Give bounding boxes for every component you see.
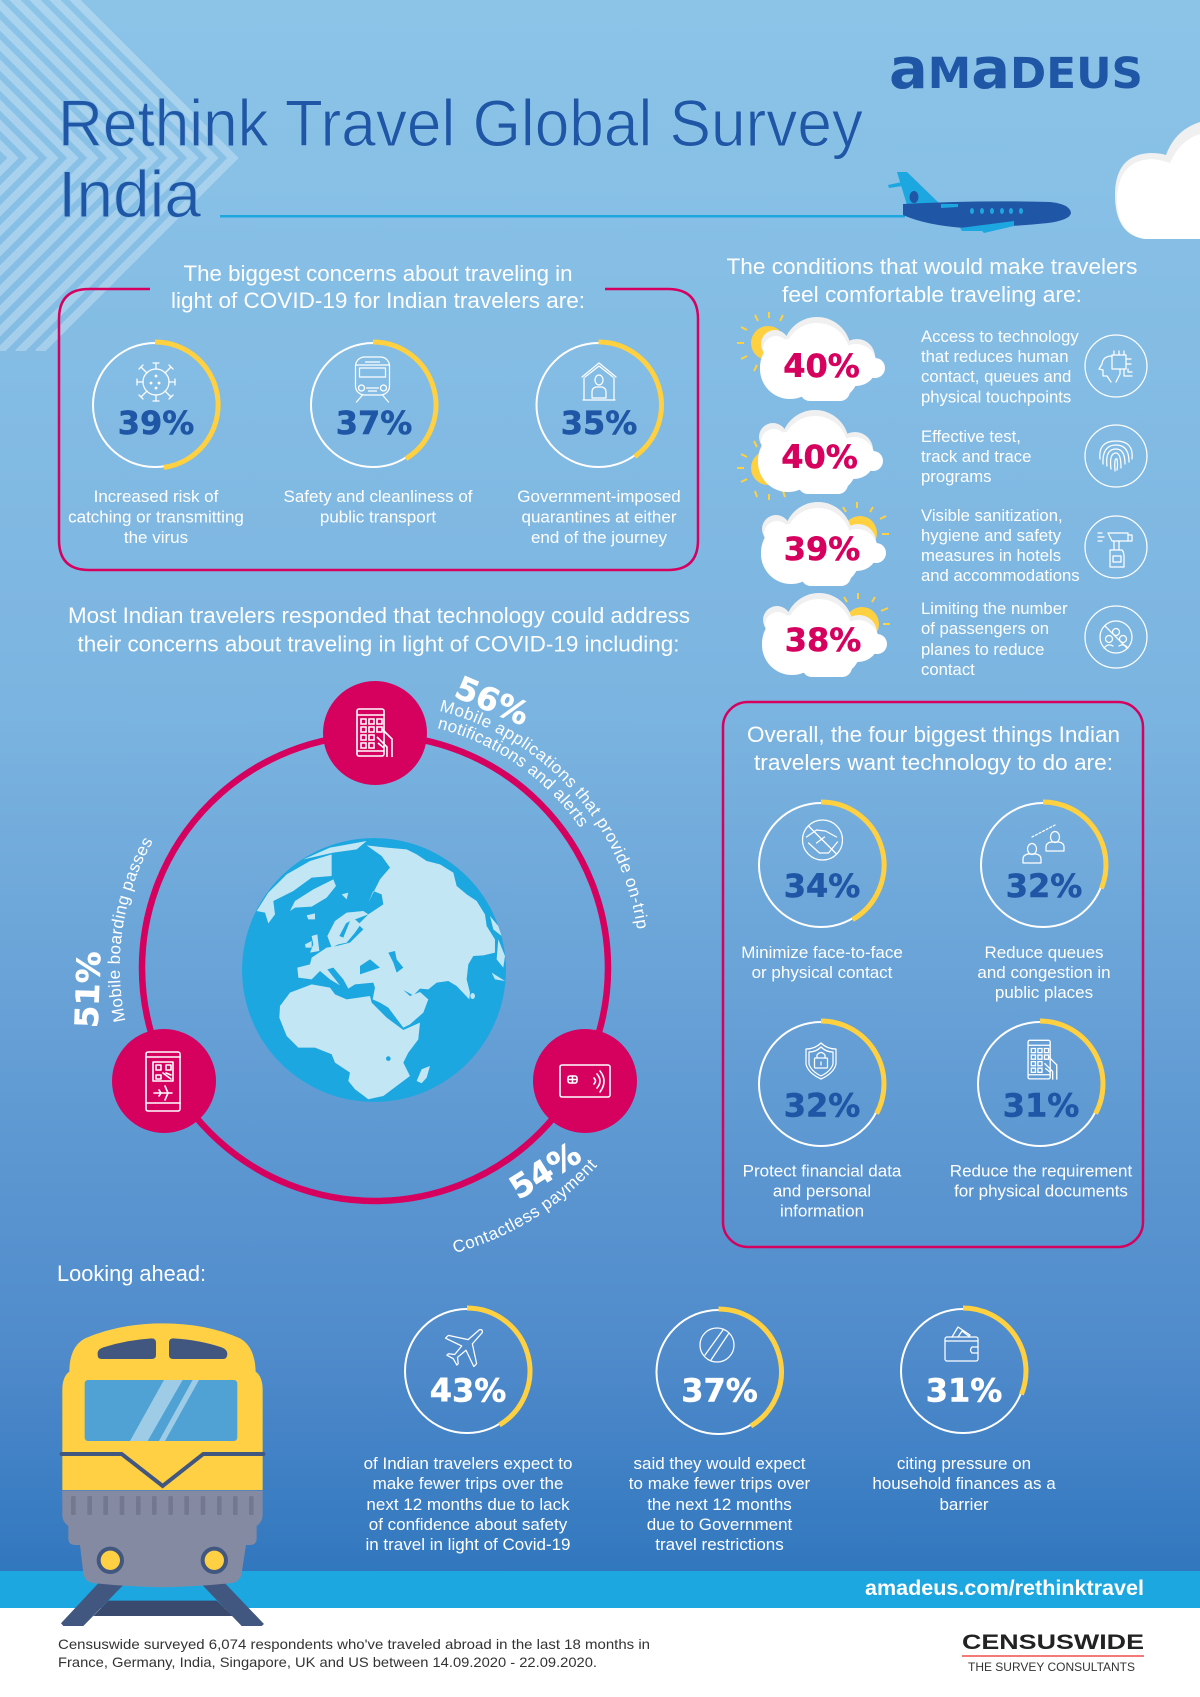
- heading: conditions: [726, 254, 1138, 307]
- stat: 37% restrictions: travel restrictions: [655, 1535, 784, 1554]
- stat: 37% train: public transport: [320, 508, 436, 526]
- condition: sanitization 39%: Visible sanitization,: [921, 506, 1063, 525]
- condition: limiting passengers 38%: contact: [921, 660, 975, 679]
- condition: technology 40%: Access to technology: [921, 327, 1079, 346]
- heading: [171, 261, 585, 313]
- stat: 37% restrictions: [629, 1309, 811, 1554]
- icon: airplane: [888, 172, 1071, 233]
- stat: 32% queues: Reduce queues: [984, 943, 1104, 962]
- condition: sanitization 39%: [761, 502, 1147, 586]
- heading: technology could address concerns: [68, 603, 690, 656]
- icon: card: [560, 1065, 610, 1097]
- title: India: [58, 157, 201, 231]
- icon: phone with hand: [357, 709, 392, 757]
- label: 51% boarding passes: 51%: [68, 951, 108, 1029]
- stat: 43% fewer trips: [364, 1308, 572, 1554]
- heading: Overall, the four biggest things Indian: [747, 722, 1120, 747]
- stat: 31% finances: citing pressure on: [897, 1454, 1031, 1473]
- heading: The biggest concerns about traveling in: [184, 261, 572, 286]
- icon: house with person: [582, 363, 616, 400]
- stat: 34%: Minimize face-to-face: [741, 943, 903, 962]
- icon: fingerprint: [1100, 441, 1132, 471]
- stat: 39% virus: catching or transmitting: [68, 508, 244, 526]
- heading: light of COVID-19 for Indian travelers are:: [171, 288, 585, 313]
- condition: sanitization 39%: hygiene and safety: [921, 526, 1062, 545]
- icon: no handshake: [802, 820, 842, 860]
- stat: 37% restrictions: to make fewer trips over: [629, 1474, 811, 1493]
- logo: censuswide: CENSUSWIDE: [962, 1631, 1144, 1654]
- footnote: France, Germany, India, Singapore, UK and US between 14.09.2020 - 22.09.2020.: [58, 1654, 597, 1670]
- stat: 43% fewer trips: of confidence about safety: [369, 1515, 568, 1534]
- stat: 32% data: [743, 1021, 902, 1220]
- cloud: top right: [1115, 122, 1200, 239]
- icon: no crowd: [1100, 621, 1132, 653]
- stat: 32% data: Protect financial data: [743, 1162, 902, 1180]
- heading: [747, 722, 1120, 775]
- stat: 32% data: information: [780, 1202, 864, 1220]
- panel: four biggest things: [723, 702, 1143, 1247]
- logo: censuswide: THE SURVEY CONSULTANTS: [968, 1660, 1135, 1674]
- condition: limiting passengers 38%: planes to reduce: [921, 640, 1044, 659]
- stat: 43% fewer trips: 43%: [430, 1372, 506, 1410]
- condition: technology 40%: 40%: [783, 347, 860, 385]
- icon: plane: [438, 1316, 496, 1374]
- flight path line: [220, 215, 905, 218]
- stat: 37% restrictions: 37%: [681, 1372, 758, 1410]
- diagram: technology ring and globe: [68, 668, 648, 1252]
- stat: 34%: or physical contact: [752, 963, 893, 982]
- label: 56% mobile applications: Mobile applications that provide on-trip: [440, 700, 648, 928]
- icon: spray bottle: [1098, 533, 1132, 567]
- icon: qr phone: [146, 1052, 180, 1111]
- panel outline: [59, 289, 698, 570]
- logo: amadeus: aMaDEUS: [889, 37, 1143, 102]
- stat: 31% finances: barrier: [939, 1495, 989, 1514]
- condition: sanitization 39%: and accommodations: [921, 566, 1080, 585]
- stat: 34%: 34%: [784, 867, 860, 905]
- stat: 32% queues: public places: [995, 983, 1093, 1002]
- icon: people distance: [1023, 825, 1064, 863]
- stat: 37% restrictions: said they would expect: [634, 1454, 806, 1473]
- stat: 35% quarantine: 35%: [561, 404, 637, 442]
- condition: test and trace 40%: [737, 410, 1147, 500]
- stat: 43% fewer trips: make fewer trips over the: [373, 1474, 563, 1493]
- footer band: [0, 1571, 1200, 1608]
- stat: 35% quarantine: quarantines at either: [522, 508, 677, 526]
- label: 54% contactless: 54%: [503, 1134, 588, 1207]
- node: boarding pass: [112, 1029, 216, 1133]
- node: mobile apps: [323, 681, 427, 785]
- condition: technology 40%: that reduces human: [921, 347, 1068, 366]
- icon: virus: [137, 363, 175, 401]
- stat: 32% data: 32%: [784, 1086, 860, 1124]
- icon: train: [356, 357, 390, 402]
- stat: 32% data: and personal: [773, 1182, 871, 1200]
- node: contactless card: [533, 1029, 637, 1133]
- chevron pattern: [0, 0, 233, 353]
- cloud: [761, 502, 886, 586]
- footnote: Censuswide surveyed 6,074 respondents who've traveled abroad in the last 18 months in: [58, 1636, 650, 1652]
- condition: limiting passengers 38%: 38%: [785, 621, 861, 659]
- condition: sanitization 39%: 39%: [784, 530, 860, 568]
- icon: wallet: [945, 1327, 978, 1361]
- label: 51% boarding passes: [68, 838, 152, 1029]
- stat: 31% documents: 31%: [1003, 1086, 1079, 1124]
- condition: technology 40%: physical touchpoints: [921, 388, 1071, 406]
- icon: sun: [843, 502, 889, 550]
- ring: [142, 735, 608, 1201]
- stat: 32% queues: [977, 802, 1111, 1002]
- stat: 31% finances: household finances as a: [872, 1474, 1056, 1493]
- stat: 31% documents: [950, 1021, 1132, 1200]
- stat: 37% train: Safety and cleanliness of: [283, 487, 473, 506]
- stat: 32% queues: 32%: [1006, 867, 1082, 905]
- heading: technology could address concerns: their concerns about traveling in light of COVID-19 including:: [78, 632, 680, 656]
- icon: head with chip: [1099, 351, 1132, 382]
- condition: test and trace 40%: track and trace: [921, 447, 1031, 466]
- icon: phone with hand: [1028, 1040, 1057, 1080]
- stat: 37% restrictions: due to Government: [647, 1515, 793, 1534]
- heading: travelers want technology to do are:: [754, 750, 1113, 775]
- stat: 39% virus: 39%: [118, 404, 194, 442]
- label: 54% contactless: Contactless payment: [453, 1160, 598, 1252]
- icon: shield lock: [806, 1043, 836, 1079]
- footnote: [58, 1636, 650, 1670]
- heading: looking ahead: Looking ahead:: [57, 1261, 206, 1286]
- link: amadeus.com: amadeus.com/rethinktravel: [865, 1577, 1144, 1600]
- label: 51% boarding passes: Mobile boarding passes: [107, 838, 152, 1022]
- stat: 35% quarantine: [517, 342, 681, 547]
- label: 56% mobile applications: notifications and alerts: [438, 720, 586, 827]
- stat: 31% documents: for physical documents: [954, 1182, 1128, 1200]
- cloud: [762, 593, 887, 677]
- stat: 35% quarantine: Government-imposed: [517, 487, 681, 506]
- stat: 31% documents: Reduce the requirement: [950, 1162, 1132, 1180]
- stat: 37% restrictions: the next 12 months: [647, 1495, 792, 1514]
- condition: sanitization 39%: measures in hotels: [921, 546, 1061, 565]
- icon: sun: [844, 593, 890, 641]
- illustration: train: [61, 1323, 264, 1626]
- panel: biggest concerns: [59, 261, 698, 570]
- heading: conditions: feel comfortable traveling are:: [782, 282, 1082, 307]
- stat: 35% quarantine: end of the journey: [531, 528, 668, 547]
- stat: 31% finances: [872, 1308, 1056, 1514]
- stat: 43% fewer trips: next 12 months due to lack: [366, 1495, 570, 1514]
- condition: test and trace 40%: Effective test,: [921, 427, 1021, 446]
- condition: technology 40%: [737, 312, 1147, 406]
- stat: 34%: [741, 802, 903, 982]
- stat: 43% fewer trips: in travel in light of Covid-19: [365, 1535, 571, 1554]
- condition: technology 40%: contact, queues and: [921, 367, 1071, 386]
- icon: sun: [737, 441, 785, 500]
- logo: censuswide: [962, 1631, 1144, 1674]
- stat: 32% queues: and congestion in: [977, 963, 1111, 982]
- condition: test and trace 40%: 40%: [781, 438, 858, 476]
- stat: 39% virus: the virus: [124, 528, 188, 547]
- condition: limiting passengers 38%: of passengers on: [921, 619, 1049, 638]
- heading: technology could address concerns: Most Indian travelers responded that technology could address: [68, 603, 690, 628]
- stat: 37% train: 37%: [336, 404, 412, 442]
- stat: 39% virus: Increased risk of: [94, 487, 219, 506]
- stat: 43% fewer trips: of Indian travelers expect to: [364, 1454, 572, 1473]
- cloud: [758, 410, 883, 494]
- condition: limiting passengers 38%: Limiting the number: [921, 599, 1068, 618]
- title: Rethink Travel Global Survey: [58, 86, 863, 160]
- stat: 39% virus: [68, 342, 244, 547]
- title: [58, 86, 863, 231]
- label: 56% mobile applications: 56%: [450, 668, 535, 733]
- stat: 37% train: [283, 342, 473, 526]
- cloud: [760, 317, 885, 401]
- condition: limiting passengers 38%: [762, 593, 1147, 679]
- heading: conditions: The conditions that would make travelers: [726, 254, 1138, 279]
- icon: prohibited: [700, 1328, 734, 1362]
- footer white area: [0, 1608, 1200, 1697]
- condition: test and trace 40%: programs: [921, 467, 991, 486]
- globe: [242, 838, 506, 1102]
- stat: 31% finances: 31%: [926, 1372, 1002, 1410]
- icon: sun: [737, 312, 785, 371]
